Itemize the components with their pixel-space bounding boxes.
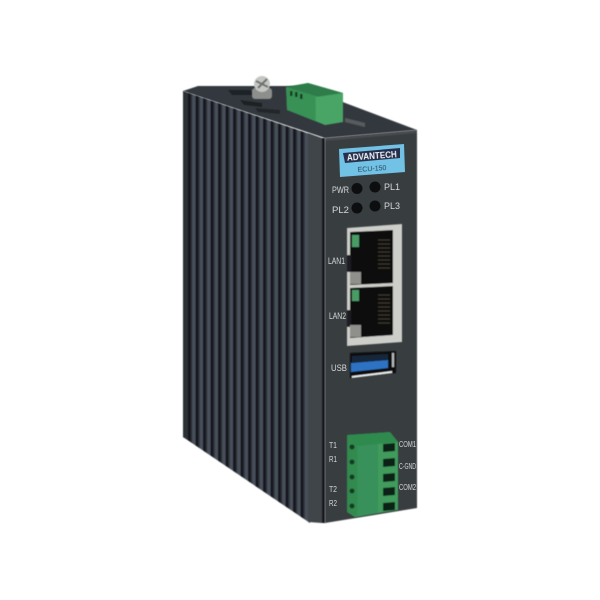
serial pin labels: T1	[329, 441, 337, 450]
LED labels: PWR	[332, 185, 349, 195]
serial pin labels: COM1	[399, 440, 416, 449]
serial pin labels: COM2	[399, 483, 416, 492]
brand name: ADVANTECH	[347, 149, 397, 163]
LED labels: PL1	[384, 182, 400, 192]
serial pin labels: C-GND	[399, 462, 416, 471]
terminal screws	[350, 444, 354, 508]
LAN 1 contacts	[378, 240, 390, 268]
LAN 1 LEDs	[352, 235, 359, 247]
serial pin labels	[329, 440, 416, 508]
serial pin labels: R2	[329, 499, 337, 508]
LAN 2 contacts	[378, 295, 390, 323]
LED labels	[332, 182, 400, 215]
label plate: ADVANTECH ECU-150	[339, 144, 405, 177]
serial pin labels: T2	[329, 485, 337, 494]
LED labels: PL3	[384, 201, 400, 211]
LAN ports	[347, 224, 402, 346]
serial pin labels: R1	[329, 455, 337, 464]
LAN 1 label: LAN1	[328, 256, 345, 266]
terminal sockets	[383, 443, 395, 511]
icon: top green terminal connector	[286, 83, 343, 125]
model name: ECU-150	[357, 165, 387, 174]
panel: top face	[183, 86, 417, 138]
USB label: USB	[331, 363, 347, 373]
panel: ribbed heat sink side	[183, 91, 325, 523]
LAN 2 LEDs	[352, 290, 359, 301]
panel: front face	[325, 130, 417, 523]
USB port	[350, 351, 396, 378]
LED labels: PL2	[332, 205, 349, 215]
status LEDs	[332, 182, 400, 215]
LAN 2 label: LAN2	[329, 311, 346, 321]
green serial terminal block	[347, 432, 398, 517]
icon: top mounting screw	[252, 76, 272, 99]
